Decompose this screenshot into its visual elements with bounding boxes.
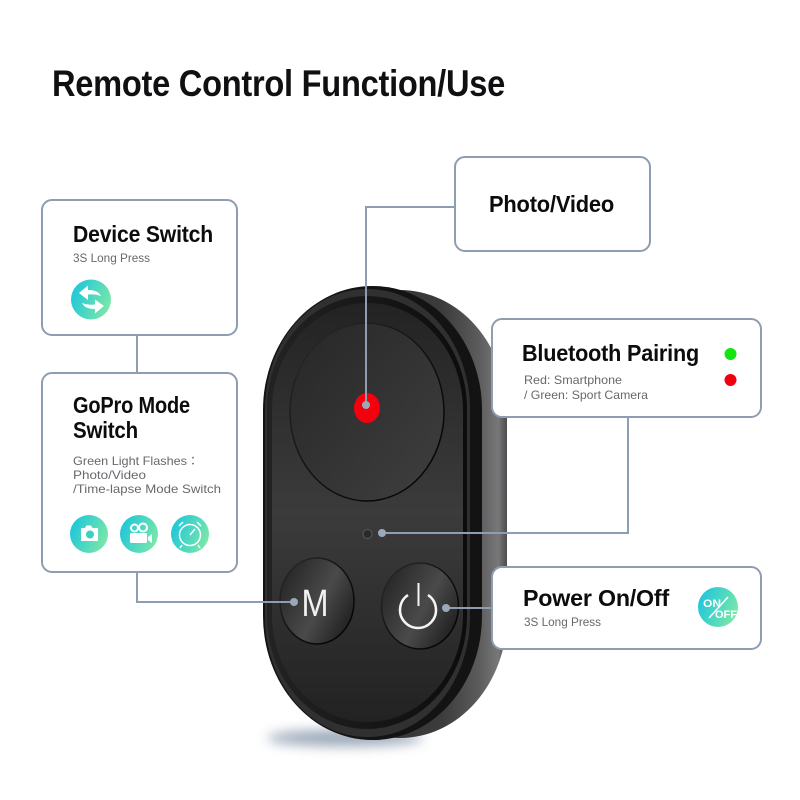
heading: bluetooth pairing: Bluetooth Pairing	[522, 340, 699, 366]
device side edge	[292, 290, 507, 738]
panel: power on/off	[492, 567, 761, 649]
heading: gopro mode switch	[73, 392, 190, 443]
text: mode description: Photo/Video	[73, 468, 146, 482]
text: mode description: ：	[187, 454, 199, 468]
panel: photo/video	[455, 157, 650, 251]
M button	[280, 558, 354, 644]
panel: gopro mode switch	[42, 373, 237, 572]
heading: gopro mode switch: GoPro Mode	[73, 392, 190, 418]
text: long press: 3S Long Press	[524, 615, 601, 629]
text: pairing colours: Red: Smartphone	[524, 373, 622, 387]
panel: device switch	[42, 200, 237, 335]
icon: time-lapse clock	[171, 515, 209, 553]
icon: video camera	[120, 515, 158, 553]
status LED	[363, 530, 372, 538]
text: mode description: /Time-lapse Mode Switch	[73, 482, 221, 496]
icon: on/off: ON	[703, 598, 721, 610]
icon: red light	[724, 374, 736, 386]
icon: on/off: OFF	[715, 609, 737, 621]
title: Remote Control Function/Use	[52, 63, 505, 104]
remote control device	[263, 286, 507, 740]
text: pairing colours	[524, 373, 648, 402]
heading: power on/off: Power On/Off	[523, 585, 670, 611]
device shadow	[267, 730, 423, 746]
connector: gopro to M button	[137, 572, 298, 606]
connector: device switch to gopro	[136, 335, 138, 373]
icon: green light	[724, 348, 736, 360]
icon: switch arrows	[71, 280, 111, 320]
icon: on/off	[698, 587, 738, 627]
heading: device switch: Device Switch	[73, 221, 213, 247]
text: long press: 3S Long Press	[73, 251, 150, 265]
icon: camera	[70, 515, 108, 553]
power button	[382, 563, 458, 649]
heading: gopro mode switch: Switch	[73, 417, 138, 443]
panel: bluetooth pairing	[492, 319, 761, 417]
text: pairing colours: / Green: Sport Camera	[524, 388, 648, 402]
connector: photo/video	[362, 207, 455, 409]
text: mode description	[73, 454, 221, 496]
text: mode description: Green Light Flashes	[73, 454, 187, 468]
device face	[272, 303, 463, 722]
device front shell	[263, 286, 482, 740]
connector: bluetooth to LED	[378, 417, 628, 537]
connector: power	[442, 604, 492, 612]
red indicator	[354, 393, 380, 423]
heading: photo/video: Photo/Video	[489, 191, 614, 217]
M button: M	[302, 583, 328, 625]
main photo button	[290, 323, 444, 501]
